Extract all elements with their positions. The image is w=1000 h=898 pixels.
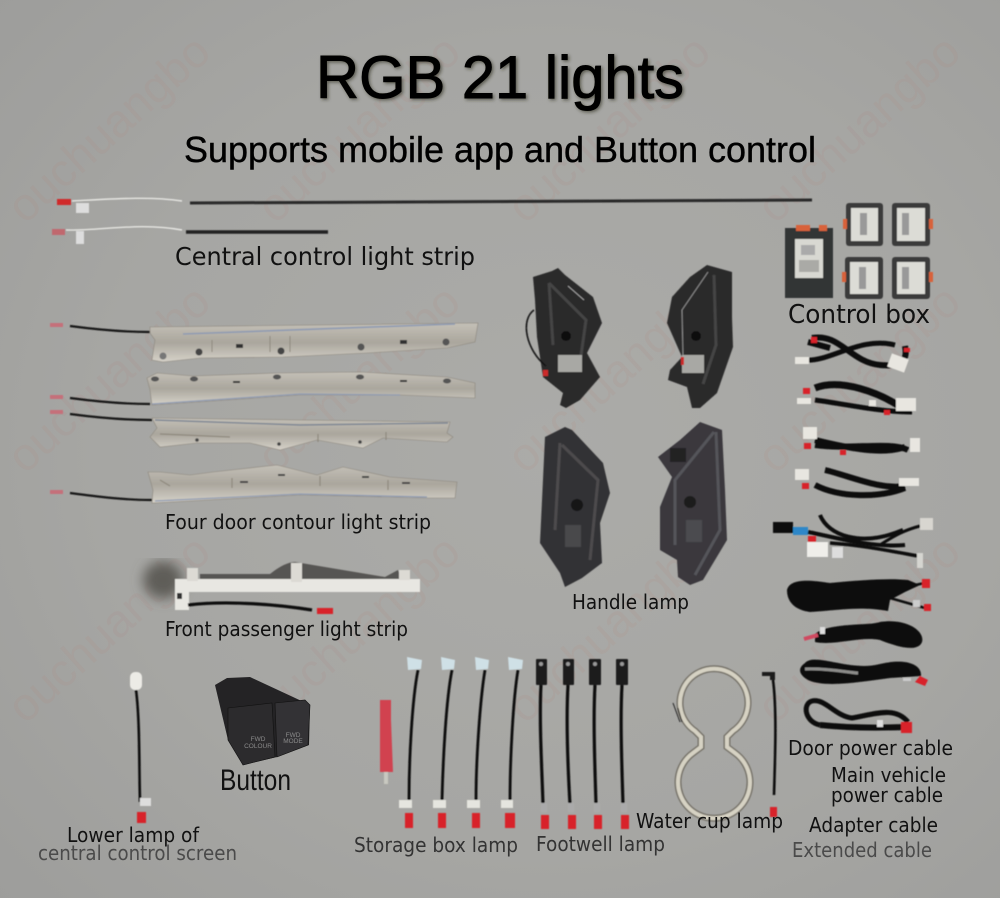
wire and connectors [762,672,777,817]
icon: lower lamp [130,672,151,823]
panel: water cup lamp [673,669,777,818]
door box 4 [892,257,933,299]
panel: handle lamps [526,265,733,587]
ring [673,669,750,818]
icon: red tool [380,700,393,784]
lamp 2 [563,659,576,829]
coil 3 [800,660,928,686]
panel: door harnesses [773,337,933,733]
watermarks: ouchuangbo [0,24,220,232]
label: adapter cable: Adapter cable [809,813,938,837]
coil 4 [806,701,912,733]
watermarks: ouchuangbo [0,524,220,732]
harness 4 [795,469,919,495]
watermarks [0,24,970,732]
watermarks: ouchuangbo [747,274,970,482]
label: control box: Control box [788,300,930,330]
handle 1 [526,268,602,408]
title: RGB 21 lights [316,44,684,111]
door box 1 [843,203,883,246]
panel: footwell lamps [536,659,629,829]
watermarks: ouchuangbo [497,274,720,482]
lamp 3 [589,659,602,829]
icon: button: FWD [251,736,266,743]
lamp 1 [536,659,549,829]
label: main vehicle power cable: Main vehicle [831,763,946,787]
door box 2 [892,203,933,246]
icon: button [215,677,310,765]
wire [188,603,312,610]
strip 2 [50,372,475,405]
label: lower lamp: Lower lamp of [67,823,200,847]
harness 2 [797,385,916,415]
dark shadow blob [143,561,183,599]
connector [317,608,333,614]
label: main vehicle power cable [831,763,946,807]
harness 5: main vehicle [773,515,933,568]
harness 3 [803,427,920,455]
short strip [52,227,328,244]
main control box [785,225,833,298]
watermarks: ouchuangbo [747,524,970,732]
harness 1 [795,337,910,373]
watermarks: ouchuangbo [247,274,470,482]
label: door power cable: Door power cable [788,736,953,760]
label: extended cable: Extended cable [792,838,932,862]
watermarks: ouchuangbo [497,24,720,232]
strip 4 [50,465,457,503]
handle 3 [540,427,610,587]
label: water cup lamp: Water cup lamp [636,809,783,833]
strip 1 [50,323,478,362]
icon: button: MODE [283,738,303,745]
label: handle lamp: Handle lamp [572,590,689,614]
watermarks: ouchuangbo [0,274,220,482]
label: button: Button [220,764,291,797]
label: central control screen: central control screen [38,841,237,865]
lamp 4 [501,657,523,828]
panel: control boxes [785,203,933,299]
strip body [175,562,420,610]
panel: four door contour strips [50,323,478,503]
lamp 1 [399,657,422,828]
watermarks: ouchuangbo [747,24,970,232]
label: main vehicle power cable: power cable [831,783,943,807]
subtitle: Supports mobile app and Button control [184,129,816,170]
lamp 3 [467,657,489,828]
long strip [57,198,812,213]
coil 1: door power cable [787,579,931,612]
strip 3 [50,410,453,450]
label: front passenger: Front passenger light strip [165,617,408,641]
label: storage box lamp: Storage box lamp [354,833,518,857]
lamp 2 [433,657,455,828]
panel: storage box lamps [399,657,523,828]
coil 2 [804,621,922,648]
label: footwell lamp: Footwell lamp [536,832,665,856]
watermarks: ouchuangbo [497,524,720,732]
label: four door: Four door contour light strip [165,510,431,534]
panel: front passenger light strip [143,561,420,614]
watermarks: ouchuangbo [247,24,470,232]
lamp 4 [616,659,629,829]
icon: button: COLOUR [244,743,272,750]
handle 4 [658,422,727,585]
panel: central control light strips [52,198,812,244]
handle 2 [667,265,733,408]
watermarks: ouchuangbo [247,524,470,732]
door box 3 [842,257,883,299]
icon: button: FWD [286,732,301,739]
label: central control: Central control light strip [175,242,475,271]
